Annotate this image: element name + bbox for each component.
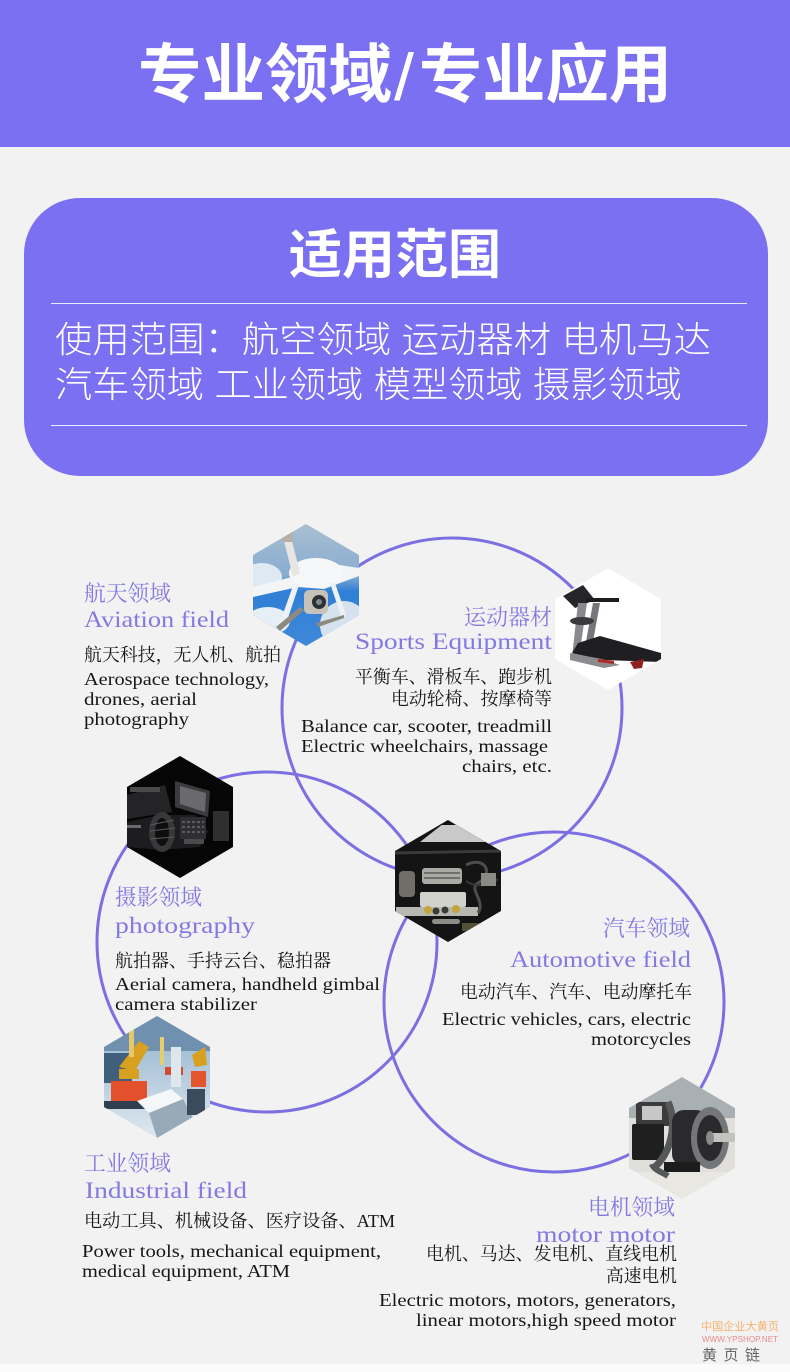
text block: motor field: linear motors,high speed motor xyxy=(416,1310,676,1330)
text block: sports equipment: Balance car, scooter, treadmill xyxy=(301,716,552,736)
photography description: 航拍器、手持云台、稳拍器 xyxy=(115,951,331,971)
header banner xyxy=(0,0,790,147)
text block: industrial field: medical equipment, ATM xyxy=(82,1261,291,1281)
sports heading: 运动器材 xyxy=(464,605,552,630)
industrial heading: 工业领域 xyxy=(84,1151,171,1176)
text block: photography: Aerial camera, handheld gimbal xyxy=(115,974,380,994)
watermark: 黄页链 xyxy=(702,1347,760,1364)
venn circles xyxy=(97,538,724,1172)
aviation description: 航天科技，无人机、航拍 xyxy=(84,645,281,665)
text block: aviation field: Aerospace technology, xyxy=(84,669,269,689)
industrial description: 电动工具、机械设备、医疗设备、ATM xyxy=(84,1211,395,1231)
text block: sports equipment: 电动轮椅、按摩椅等 xyxy=(391,689,552,709)
text block: motor field xyxy=(379,1195,677,1330)
aviation heading: 航天领域 xyxy=(84,581,171,606)
title xyxy=(138,39,672,114)
text block: automotive field: Electric vehicles, cars, electric xyxy=(442,1009,691,1029)
automotive heading: 汽车领域 xyxy=(603,916,690,941)
icon: car engine hexagon photo xyxy=(395,820,501,942)
text block: industrial field: Power tools, mechanical equipment, xyxy=(82,1241,381,1261)
title: 专业应用 xyxy=(419,39,672,111)
panel heading: 适用范围 xyxy=(289,226,501,285)
text block: aviation field: Aviation field xyxy=(84,607,230,632)
text block: photography: photography xyxy=(115,913,256,938)
text block: sports equipment xyxy=(301,605,553,776)
text block: photography xyxy=(115,885,380,1014)
title: 专业领域 xyxy=(138,39,392,111)
watermark xyxy=(701,1319,779,1364)
text block: photography: camera stabilizer xyxy=(115,994,257,1014)
title: / xyxy=(394,40,415,114)
text block: sports equipment: chairs, etc. xyxy=(462,756,552,776)
text block: industrial field xyxy=(82,1151,395,1281)
text block: motor field: motor motor xyxy=(536,1222,675,1247)
icon: video camera hexagon photo xyxy=(127,756,233,878)
motor heading: 电机领域 xyxy=(588,1195,675,1220)
text block: motor field: 高速电机 xyxy=(606,1266,677,1286)
text block: automotive field: Automotive field xyxy=(510,947,692,972)
sports description: 平衡车、滑板车、跑步机 xyxy=(355,667,552,687)
icon: treadmill hexagon photo xyxy=(555,568,661,690)
panel: scope of application xyxy=(24,198,768,476)
watermark: 中国企业大黄页 xyxy=(701,1319,779,1333)
watermark: WWW.YPSHOP.NET xyxy=(702,1335,778,1344)
text block: motor field: Electric motors, motors, generators, xyxy=(379,1290,676,1310)
scope text line 2: 汽车领域 工业领域 模型领域 摄影领域 xyxy=(55,364,682,405)
photography heading: 摄影领域 xyxy=(115,885,202,910)
text block: sports equipment: Sports Equipment xyxy=(355,629,553,654)
text block: aviation field: photography xyxy=(84,709,189,729)
icon: industrial robot hexagon photo xyxy=(104,1016,210,1138)
text block: aviation field xyxy=(84,581,281,729)
scope text line 1: 使用范围：航空领域 运动器材 电机马达 xyxy=(55,319,711,360)
text block: sports equipment: Electric wheelchairs, massage xyxy=(301,736,548,756)
icon: electric motor hexagon photo xyxy=(629,1077,735,1202)
motor description: 电机、马达、发电机、直线电机 xyxy=(426,1244,677,1264)
automotive description: 电动汽车、汽车、电动摩托车 xyxy=(460,982,692,1002)
icon: drone hexagon photo xyxy=(253,524,359,646)
text block: automotive field: motorcycles xyxy=(591,1029,691,1049)
text block: aviation field: drones, aerial xyxy=(84,689,197,709)
text block: automotive field xyxy=(442,916,692,1049)
text block: industrial field: Industrial field xyxy=(85,1178,248,1203)
